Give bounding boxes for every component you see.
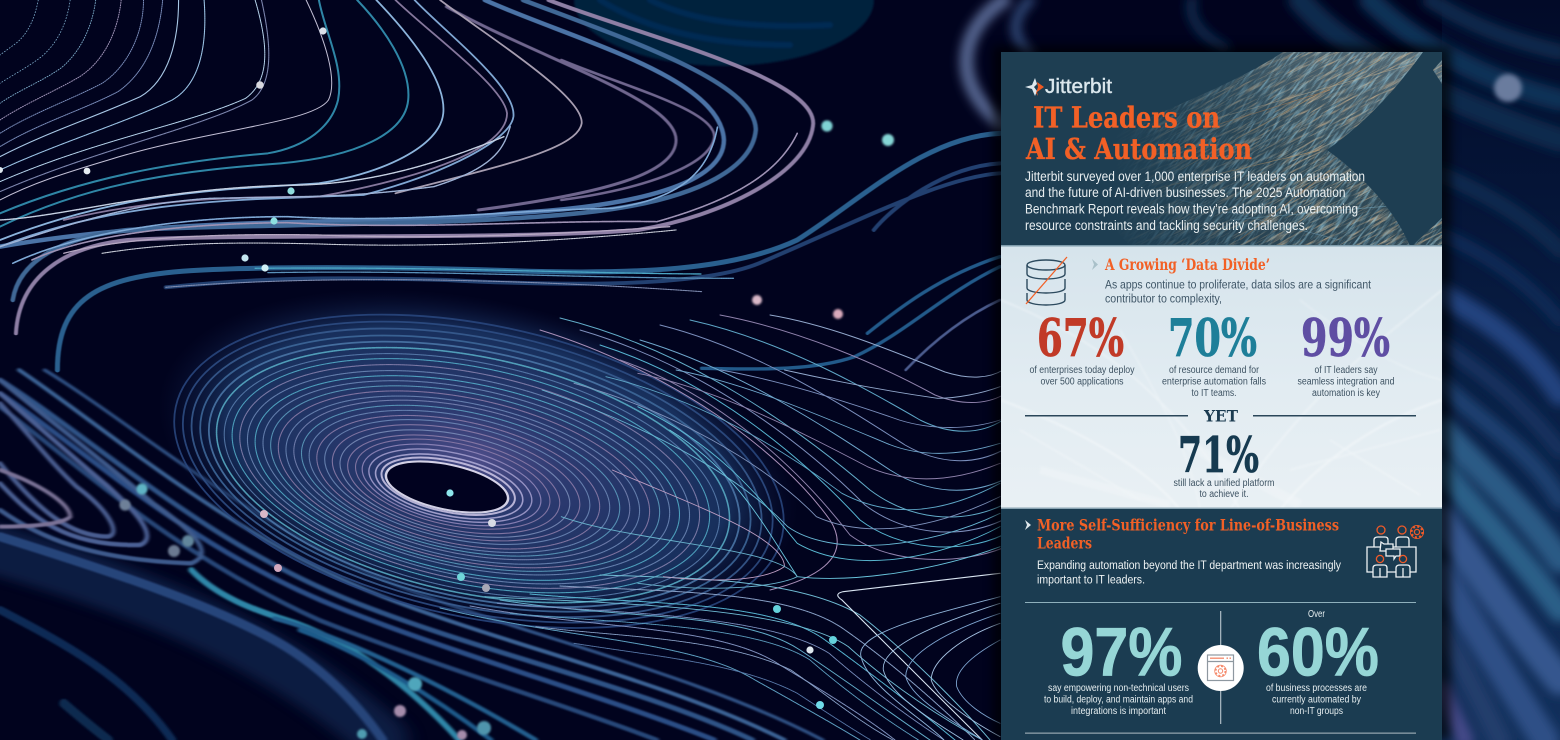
icon: database struck through: [1026, 257, 1067, 305]
panel shadow: [993, 46, 1451, 740]
stat: 99%: of IT leaders say: [1314, 365, 1378, 376]
icon: chevron: [1025, 520, 1031, 530]
stat: 60%: Over: [1308, 609, 1326, 620]
stat: 60%: of business processes are: [1266, 683, 1367, 694]
subheading: contributor to complexity,: [1105, 292, 1222, 306]
stat: 60%: [1257, 609, 1379, 717]
stream: upper lines: [0, 0, 1000, 370]
stream: dark fan top centre: [574, 0, 874, 66]
subheading: [1037, 558, 1342, 586]
intro paragraph: Jitterbit surveyed over 1,000 enterprise IT leaders on automation: [1025, 169, 1365, 184]
chart: central vortex of concentric ellipses: [127, 236, 829, 680]
title: [1025, 100, 1252, 166]
stat: 71%: to achieve it.: [1200, 489, 1248, 500]
stat: 70%: 70%: [1168, 309, 1257, 369]
stream: vortex outflow bundle: [440, 315, 1003, 740]
intro paragraph: and the future of AI-driven businesses. The 2025 Automation: [1025, 185, 1346, 200]
stat: 71%: still lack a unified platform: [1174, 478, 1274, 489]
stat: 67%: over 500 applications: [1040, 376, 1124, 388]
intro paragraph: Benchmark Report reveals how they’re adopting AI, overcoming: [1025, 202, 1358, 216]
heading: A Growing ‘Data Divide’: [1104, 255, 1270, 274]
icon: chevron: [1092, 259, 1098, 270]
title: IT Leaders on: [1033, 100, 1220, 134]
header image: fractured fan texture: [1128, 52, 1442, 245]
intro paragraph: resource constraints and tackling security challenges.: [1025, 218, 1308, 233]
subheading: Expanding automation beyond the IT department was increasingly: [1037, 558, 1342, 572]
stat: 97%: to build, deploy, and maintain apps and: [1044, 694, 1193, 706]
stat: 99%: [1298, 309, 1394, 399]
stat: 70%: to IT teams.: [1192, 388, 1236, 399]
stat: 71%: 71%: [1178, 426, 1259, 484]
stat: 60%: currently automated by: [1272, 694, 1361, 706]
stat: 67%: [1030, 309, 1135, 388]
heading: Leaders: [1037, 534, 1092, 552]
stream: right-hand blurred bands: [966, 0, 1560, 740]
heading: More Self-Sufficiency for Line-of-Business: [1037, 516, 1339, 534]
subheading: [1105, 278, 1371, 306]
stat: 97%: 97%: [1060, 614, 1182, 690]
stat: 99%: automation is key: [1312, 388, 1380, 399]
subheading: As apps continue to proliferate, data silos are a significant: [1105, 278, 1371, 292]
panel: header: [1001, 52, 1442, 245]
stat: 60%: non-IT groups: [1290, 706, 1343, 717]
subheading: important to IT leaders.: [1037, 572, 1145, 586]
stat: 97%: [1044, 614, 1193, 717]
stat: 97%: say empowering non-technical users: [1048, 683, 1189, 694]
stat: 67%: of enterprises today deploy: [1030, 365, 1135, 376]
stat: 99%: 99%: [1301, 309, 1390, 369]
stat: 70%: [1162, 309, 1266, 399]
stat: 70%: enterprise automation falls: [1162, 376, 1266, 388]
logo: Jitterbit: Jitterbit: [1045, 76, 1112, 98]
icon: browser window with gear: [1198, 645, 1244, 691]
stat: 70%: of resource demand for: [1169, 365, 1260, 376]
stat: 60%: 60%: [1257, 614, 1379, 690]
panel: More Self-Sufficiency: [1001, 508, 1442, 740]
heading: [1037, 516, 1339, 552]
divider label: YET: YET: [1203, 406, 1238, 426]
stat: 97%: integrations is important: [1071, 706, 1166, 717]
icon: team meeting: [1367, 525, 1424, 577]
stat: 71%: [1174, 426, 1274, 500]
intro paragraph: [1025, 169, 1365, 233]
stream: lower-left broad bands: [0, 370, 823, 740]
panel: A Growing Data Divide: [1001, 245, 1442, 510]
stat: 99%: seamless integration and: [1298, 376, 1394, 388]
title: AI & Automation: [1025, 132, 1252, 166]
stream: vortex outflow lines: [485, 370, 1000, 740]
stat: 67%: 67%: [1037, 309, 1124, 369]
